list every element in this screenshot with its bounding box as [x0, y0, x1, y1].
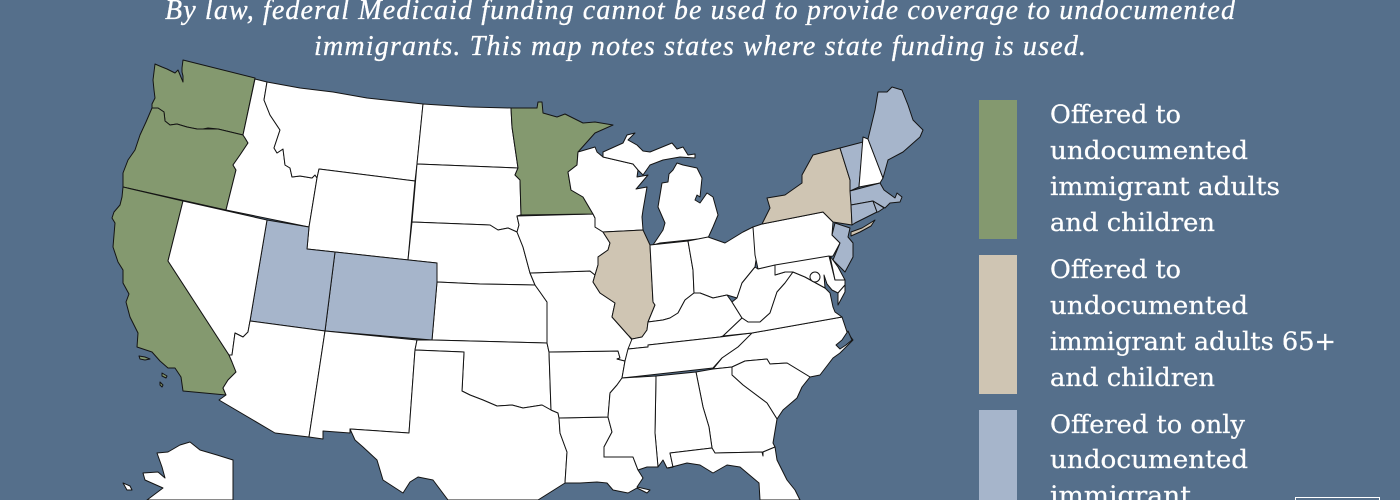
state: South Carolina	[732, 359, 810, 419]
legend item: adults 65+ and children: immigrant adults 65+	[1050, 327, 1336, 356]
state: Louisiana	[559, 417, 650, 493]
state: Minnesota	[511, 102, 613, 215]
legend item: only immigrant children	[979, 410, 1248, 500]
state: Maryland	[775, 256, 845, 293]
state: New York	[762, 148, 852, 225]
state: Missouri	[530, 271, 632, 361]
state: Delaware	[830, 256, 845, 280]
legend item: only immigrant children: undocumented	[1050, 445, 1248, 474]
state: Nebraska	[408, 222, 535, 285]
state: Kansas	[432, 282, 547, 343]
state: Montana	[264, 82, 423, 181]
state: Wisconsin	[568, 147, 648, 232]
marker: Washington DC	[810, 272, 820, 282]
legend item: adults 65+ and children: Offered to	[1050, 255, 1181, 284]
state: Virginia	[723, 272, 842, 336]
legend item: adults and children: and children	[1050, 208, 1215, 237]
state: California	[112, 187, 236, 395]
state: Michigan lower peninsula	[653, 163, 718, 245]
legend	[979, 100, 1336, 500]
state: Oregon	[123, 108, 248, 210]
state: New Jersey	[832, 223, 853, 272]
legend item: adults 65+ and children: and children	[1050, 363, 1215, 392]
state: Nevada	[168, 201, 267, 355]
legend item: adults and children	[979, 100, 1280, 239]
title	[165, 0, 1236, 62]
state: Ohio	[688, 227, 757, 298]
state: Arizona	[219, 321, 325, 437]
state: Mississippi	[604, 376, 658, 470]
Pamlico Sound	[836, 331, 852, 349]
legend item: adults and children: undocumented	[1050, 136, 1248, 165]
legend item: adults 65+ and children: undocumented	[1050, 291, 1248, 320]
state: Utah	[250, 220, 335, 331]
state: North Carolina	[713, 317, 853, 377]
state: Virginia eastern shore	[838, 285, 845, 305]
state: Indiana	[648, 241, 694, 322]
state: Tennessee	[622, 333, 752, 378]
state: Florida	[668, 447, 800, 500]
legend item: adults 65+ and children	[979, 255, 1336, 394]
state: North Dakota	[417, 104, 518, 168]
state: South Dakota	[412, 164, 521, 232]
state: Vermont	[840, 142, 863, 191]
state: Alabama	[655, 372, 712, 468]
state: New York Long Island	[851, 220, 875, 236]
state: Alaska	[143, 442, 233, 500]
state: Kentucky	[628, 293, 742, 349]
state: West Virginia	[732, 265, 793, 322]
Alaska island	[123, 483, 132, 490]
state: Michigan upper peninsula	[603, 133, 695, 175]
state: Rhode Island	[873, 201, 884, 212]
state: New Hampshire	[859, 137, 883, 187]
state: Georgia	[696, 367, 777, 456]
state: Massachusetts	[850, 183, 902, 208]
state: Pennsylvania	[753, 212, 840, 269]
legend item: adults and children: immigrant adults	[1050, 172, 1280, 201]
California islands	[139, 356, 167, 387]
state: Wyoming	[307, 169, 415, 260]
state: Washington	[152, 60, 255, 135]
US map	[112, 60, 923, 500]
state: Idaho	[226, 79, 317, 227]
state: Oklahoma	[415, 340, 551, 410]
state: Colorado	[325, 252, 437, 340]
legend item: only immigrant children: Offered to only	[1050, 410, 1246, 439]
state: Illinois	[593, 230, 655, 339]
legend item: adults and children: Offered to	[1050, 100, 1181, 129]
state: Texas	[350, 350, 567, 500]
state: Connecticut	[851, 201, 877, 225]
state: New Mexico	[309, 331, 417, 439]
state: Maine	[868, 87, 923, 178]
state: Arkansas	[549, 351, 625, 418]
state: Iowa	[517, 214, 610, 275]
title: immigrants. This map notes states where state funding is used.	[314, 31, 1086, 62]
button outline	[1296, 498, 1380, 500]
